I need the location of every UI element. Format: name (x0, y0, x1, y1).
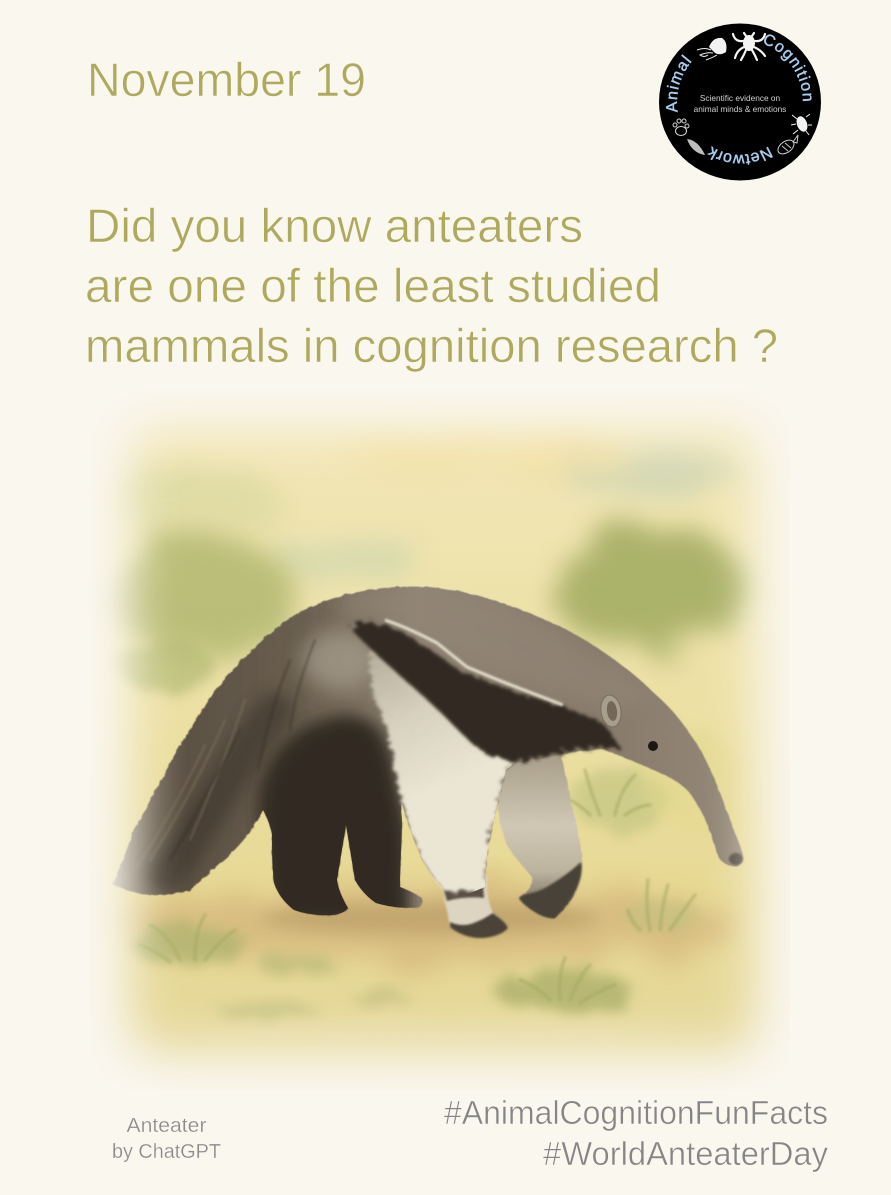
icon: octopus (733, 33, 765, 60)
near front paw (450, 913, 508, 938)
image caption: by ChatGPT (112, 1141, 221, 1163)
icon: fish (775, 135, 798, 157)
lower near front leg (444, 876, 508, 928)
grass tufts (140, 770, 695, 1003)
ground shadow (260, 902, 600, 934)
question heading (85, 199, 778, 372)
ear (600, 694, 622, 728)
icon: feather (687, 139, 705, 155)
question heading: mammals in cognition research ? (85, 319, 778, 372)
dark tail core (165, 710, 275, 875)
logo ring text top: Animal Cognition (666, 34, 812, 112)
black shoulder stripe (350, 621, 619, 763)
logo tagline (694, 93, 786, 114)
logo: Animal Cognition Network badge (659, 24, 821, 180)
painted backdrop (90, 390, 790, 1090)
image caption (112, 1115, 221, 1163)
anteater (112, 585, 743, 938)
far front claw (519, 862, 582, 918)
dark wrist band (443, 884, 484, 901)
logo tagline: Scientific evidence on (700, 93, 781, 103)
watercolour illustration (90, 390, 790, 1090)
hashtags (444, 1094, 828, 1172)
icon: jellyfish (697, 38, 726, 60)
dark haunch and hind legs (258, 715, 410, 925)
interior shading clipped to the silhouette (165, 585, 650, 925)
logo ring word Network: Network (707, 146, 773, 165)
fur strokes on tail and flank (151, 638, 317, 858)
hashtags: #AnimalCognitionFunFacts (444, 1094, 828, 1131)
eye (648, 741, 658, 751)
pale chest and near front leg (369, 650, 515, 892)
icon: paw print (673, 119, 689, 136)
image caption: Anteater (126, 1115, 207, 1137)
infographic canvas (87, 24, 828, 1172)
nostril tip (729, 853, 743, 865)
icon: beetle (791, 114, 812, 135)
pale flank wash (302, 630, 378, 690)
body and tail silhouette (112, 587, 743, 915)
hashtags: #WorldAnteaterDay (543, 1135, 828, 1172)
question heading: Did you know anteaters (86, 199, 583, 252)
date heading: November 19 (87, 53, 366, 106)
logo tagline: animal minds & emotions (694, 104, 786, 114)
question heading: are one of the least studied (85, 259, 661, 312)
far front leg (498, 750, 582, 918)
grey back (338, 586, 610, 692)
white stripe highlight (385, 620, 563, 705)
